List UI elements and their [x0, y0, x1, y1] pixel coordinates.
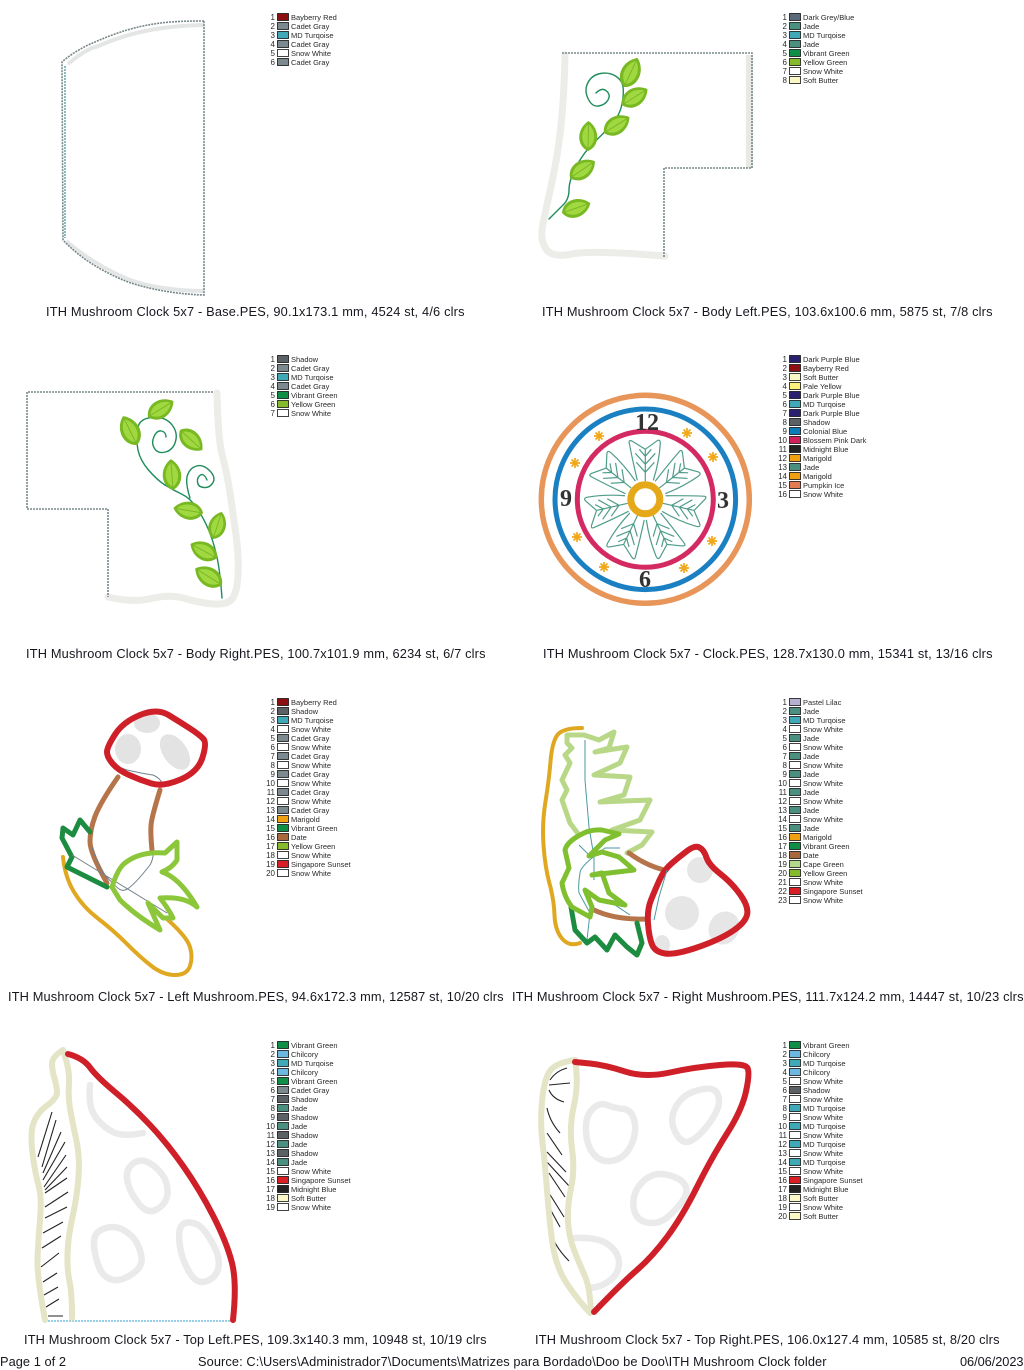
legend: top right colours: Chilcory [803, 1068, 830, 1077]
legend: left mushroom colours: 9 [271, 770, 276, 779]
legend: right mushroom colours: Yellow Green [803, 869, 847, 878]
legend: top left colours: 10 [266, 1122, 276, 1131]
panel: Left Mushroom design [8, 698, 504, 1004]
legend: top right colours: Vibrant Green [803, 1041, 850, 1050]
legend: top right colours: Snow White [803, 1131, 843, 1140]
legend: body right colours: MD Turqoise [291, 373, 334, 382]
legend: body right colours: Cadet Gray [291, 382, 330, 391]
legend: right mushroom colours: Date [803, 851, 819, 860]
legend: top left colours: Singapore Sunset [291, 1176, 352, 1185]
legend: base colours: 4 [271, 40, 276, 49]
caption: base: ITH Mushroom Clock 5x7 - Base.PES, 90.1x173.1 mm, 4524 st, 4/6 clrs [46, 304, 464, 319]
legend: top right colours: 20 [778, 1212, 788, 1221]
legend: top right colours: 13 [778, 1149, 788, 1158]
legend: left mushroom colours: Cadet Gray [291, 752, 330, 761]
legend: right mushroom colours: 19 [778, 860, 788, 869]
legend: base colours [271, 13, 337, 67]
legend: left mushroom colours: Snow White [291, 743, 331, 752]
legend: top left colours: Chilcory [291, 1050, 318, 1059]
legend: body left colours: 8 [783, 76, 788, 85]
legend: body left colours: 2 [783, 22, 788, 31]
legend: right mushroom colours: Cape Green [803, 860, 844, 869]
legend: top left colours: 5 [271, 1077, 276, 1086]
legend: right mushroom colours: Jade [803, 824, 819, 833]
legend: clock colours: Dark Purple Blue [803, 391, 860, 400]
legend: top right colours: 1 [783, 1041, 788, 1050]
legend: top left colours: Shadow [291, 1095, 319, 1104]
legend: top left colours: 19 [266, 1203, 276, 1212]
legend: left mushroom colours: Snow White [291, 725, 331, 734]
legend: right mushroom colours: 15 [778, 824, 788, 833]
legend: top left colours: 18 [266, 1194, 276, 1203]
legend: right mushroom colours: Snow White [803, 878, 843, 887]
artwork: base outline [62, 21, 204, 295]
legend: body left colours: 7 [783, 67, 788, 76]
legend: left mushroom colours: Singapore Sunset [291, 860, 352, 869]
artwork: clock face: 3 [717, 488, 729, 514]
legend: right mushroom colours: 8 [783, 761, 788, 770]
legend: left mushroom colours: 2 [271, 707, 276, 716]
legend: top right colours: 16 [778, 1176, 788, 1185]
legend: base colours: 3 [271, 31, 276, 40]
legend: left mushroom colours: 19 [266, 860, 276, 869]
legend: top right colours: Chilcory [803, 1050, 830, 1059]
panel: Base design [46, 13, 464, 319]
legend: top left colours: Cadet Gray [291, 1086, 330, 1095]
legend: left mushroom colours: Cadet Gray [291, 734, 330, 743]
legend: right mushroom colours: Snow White [803, 743, 843, 752]
legend: left mushroom colours: MD Turqoise [291, 716, 334, 725]
legend: body right colours: Snow White [291, 409, 331, 418]
legend: clock colours: 15 [778, 481, 788, 490]
legend: right mushroom colours: 7 [783, 752, 788, 761]
legend: left mushroom colours [266, 698, 352, 878]
legend: clock colours: 4 [783, 382, 788, 391]
legend: right mushroom colours: Jade [803, 770, 819, 779]
legend: body right colours: 2 [271, 364, 276, 373]
legend: right mushroom colours: 20 [778, 869, 788, 878]
legend: left mushroom colours: 14 [266, 815, 276, 824]
legend: base colours: MD Turqoise [291, 31, 334, 40]
legend: top right colours: Snow White [803, 1077, 843, 1086]
legend: top right colours: 9 [783, 1113, 788, 1122]
artwork: left mushroom [62, 712, 205, 975]
caption: body right: ITH Mushroom Clock 5x7 - Body Right.PES, 100.7x101.9 mm, 6234 st, 6/7 clrs [26, 646, 486, 661]
legend: body left colours [783, 13, 854, 85]
legend: left mushroom colours: 17 [266, 842, 276, 851]
legend: base colours: 5 [271, 49, 276, 58]
legend: right mushroom colours: 11 [779, 788, 788, 797]
legend: top left colours: Jade [291, 1140, 307, 1149]
legend: clock colours [778, 355, 867, 499]
footer: date: 06/06/2023 [960, 1354, 1024, 1369]
panel: Body Left design [542, 13, 992, 319]
legend: body left colours: 3 [783, 31, 788, 40]
legend: left mushroom colours: 7 [271, 752, 276, 761]
legend: top right colours: MD Turqoise [803, 1140, 846, 1149]
legend: right mushroom colours: 5 [783, 734, 788, 743]
legend: base colours: Bayberry Red [291, 13, 337, 22]
legend: clock colours: Marigold [803, 472, 832, 481]
legend: top right colours: Snow White [803, 1167, 843, 1176]
legend: base colours: 6 [271, 58, 276, 67]
legend: top left colours: Jade [291, 1122, 307, 1131]
legend: body right colours: Vibrant Green [291, 391, 338, 400]
panel: Right Mushroom design [512, 698, 1024, 1004]
legend: top left colours: 14 [266, 1158, 276, 1167]
legend: body left colours: Jade [803, 22, 819, 31]
legend: clock colours: Dark Purple Blue [803, 409, 860, 418]
legend: clock colours: 5 [783, 391, 788, 400]
legend: left mushroom colours: 4 [271, 725, 276, 734]
artwork: top right cap [541, 1060, 748, 1313]
legend: top right colours: Snow White [803, 1095, 843, 1104]
legend: body right colours: Cadet Gray [291, 364, 330, 373]
legend: right mushroom colours: Jade [803, 734, 819, 743]
legend: right mushroom colours: 14 [778, 815, 788, 824]
legend: clock colours: 6 [783, 400, 788, 409]
legend: top right colours: Midnight Blue [803, 1185, 848, 1194]
artwork: right mushroom [543, 728, 747, 955]
caption: right mushroom: ITH Mushroom Clock 5x7 - Right Mushroom.PES, 111.7x124.2 mm, 14447 st, 10/23 clrs [512, 989, 1024, 1004]
legend: clock colours: 13 [778, 463, 788, 472]
legend: body left colours: Yellow Green [803, 58, 847, 67]
legend: left mushroom colours: Shadow [291, 707, 319, 716]
legend: top left colours: Jade [291, 1104, 307, 1113]
legend: clock colours: Soft Butter [803, 373, 839, 382]
legend: top left colours: 11 [267, 1131, 276, 1140]
legend: right mushroom colours: 3 [783, 716, 788, 725]
legend: top left colours: 3 [271, 1059, 276, 1068]
legend: right mushroom colours: Jade [803, 806, 819, 815]
legend: top left colours: MD Turqoise [291, 1059, 334, 1068]
caption: top left: ITH Mushroom Clock 5x7 - Top Left.PES, 109.3x140.3 mm, 10948 st, 10/19 clrs [24, 1332, 486, 1347]
legend: top right colours: 6 [783, 1086, 788, 1095]
legend: top left colours: Shadow [291, 1131, 319, 1140]
legend: right mushroom colours: 22 [778, 887, 788, 896]
legend: top left colours: 17 [266, 1185, 276, 1194]
legend: right mushroom colours: Snow White [803, 797, 843, 806]
legend: clock colours: 8 [783, 418, 788, 427]
legend: top right colours: 8 [783, 1104, 788, 1113]
legend: left mushroom colours: Date [291, 833, 307, 842]
legend: top left colours: Snow White [291, 1167, 331, 1176]
legend: top left colours: Vibrant Green [291, 1077, 338, 1086]
legend: clock colours: 1 [783, 355, 788, 364]
legend: top right colours: 17 [778, 1185, 788, 1194]
artwork: clock face: 9 [560, 486, 572, 512]
legend: left mushroom colours: Vibrant Green [291, 824, 338, 833]
legend: right mushroom colours: Singapore Sunset [803, 887, 864, 896]
legend: top right colours: 2 [783, 1050, 788, 1059]
legend: body left colours: Snow White [803, 67, 843, 76]
legend: top left colours: 15 [266, 1167, 276, 1176]
legend: left mushroom colours: 5 [271, 734, 276, 743]
legend: clock colours: Pumpkin Ice [803, 481, 844, 490]
legend: left mushroom colours: 1 [271, 698, 276, 707]
legend: top right colours: 11 [779, 1131, 788, 1140]
legend: top left colours: 8 [271, 1104, 276, 1113]
legend: left mushroom colours: 13 [266, 806, 276, 815]
artwork: top left cap [31, 1050, 235, 1321]
legend: top right colours: 3 [783, 1059, 788, 1068]
legend: clock colours: Blossem Pink Dark [803, 436, 867, 445]
legend: right mushroom colours [778, 698, 864, 905]
legend: body left colours: Vibrant Green [803, 49, 850, 58]
legend: top left colours: 6 [271, 1086, 276, 1095]
legend: right mushroom colours: Jade [803, 707, 819, 716]
legend: left mushroom colours: 8 [271, 761, 276, 770]
legend: clock colours: 2 [783, 364, 788, 373]
legend: top right colours: 10 [778, 1122, 788, 1131]
legend: left mushroom colours: Yellow Green [291, 842, 335, 851]
legend: clock colours: Pale Yellow [803, 382, 842, 391]
panel: Top Right design [535, 1041, 1000, 1347]
legend: top left colours [266, 1041, 352, 1212]
legend: top right colours: MD Turqoise [803, 1059, 846, 1068]
legend: top right colours: Soft Butter [803, 1212, 839, 1221]
legend: clock colours: Jade [803, 463, 819, 472]
legend: body right colours: 5 [271, 391, 276, 400]
panel: Top Left design [24, 1041, 486, 1347]
legend: body left colours: Soft Butter [803, 76, 839, 85]
legend: left mushroom colours: Cadet Gray [291, 770, 330, 779]
legend: top left colours: 1 [271, 1041, 276, 1050]
legend: left mushroom colours: Cadet Gray [291, 788, 330, 797]
legend: top right colours: Singapore Sunset [803, 1176, 864, 1185]
legend: top left colours: Snow White [291, 1203, 331, 1212]
legend: top right colours: 15 [778, 1167, 788, 1176]
legend: right mushroom colours: 23 [778, 896, 788, 905]
legend: right mushroom colours: 17 [778, 842, 788, 851]
legend: base colours: Cadet Gray [291, 58, 330, 67]
legend: right mushroom colours: Vibrant Green [803, 842, 850, 851]
legend: body left colours: MD Turqoise [803, 31, 846, 40]
legend: left mushroom colours: Bayberry Red [291, 698, 337, 707]
legend: base colours: 1 [271, 13, 276, 22]
legend: top left colours: Shadow [291, 1149, 319, 1158]
legend: right mushroom colours: 10 [778, 779, 788, 788]
legend: body right colours: 3 [271, 373, 276, 382]
caption: clock: ITH Mushroom Clock 5x7 - Clock.PES, 128.7x130.0 mm, 15341 st, 13/16 clrs [543, 646, 992, 661]
legend: body right colours [271, 355, 338, 418]
legend: right mushroom colours: 13 [778, 806, 788, 815]
legend: top left colours: Vibrant Green [291, 1041, 338, 1050]
legend: top left colours: 13 [266, 1149, 276, 1158]
legend: right mushroom colours: Snow White [803, 896, 843, 905]
legend: body left colours: 5 [783, 49, 788, 58]
legend: left mushroom colours: 16 [266, 833, 276, 842]
legend: left mushroom colours: 10 [266, 779, 276, 788]
legend: left mushroom colours: Snow White [291, 761, 331, 770]
legend: left mushroom colours: Cadet Gray [291, 806, 330, 815]
legend: body left colours: 6 [783, 58, 788, 67]
legend: right mushroom colours: 21 [778, 878, 788, 887]
legend: body right colours: Yellow Green [291, 400, 335, 409]
legend: top right colours: 4 [783, 1068, 788, 1077]
legend: right mushroom colours: 2 [783, 707, 788, 716]
legend: top right colours: 19 [778, 1203, 788, 1212]
legend: base colours: Cadet Gray [291, 22, 330, 31]
legend: right mushroom colours: Snow White [803, 779, 843, 788]
legend: top right colours: Snow White [803, 1149, 843, 1158]
legend: body right colours: 7 [271, 409, 276, 418]
legend: right mushroom colours: Pastel Lilac [803, 698, 842, 707]
legend: left mushroom colours: Snow White [291, 869, 331, 878]
legend: clock colours: Dark Purple Blue [803, 355, 860, 364]
legend: top left colours: 9 [271, 1113, 276, 1122]
caption: top right: ITH Mushroom Clock 5x7 - Top Right.PES, 106.0x127.4 mm, 10585 st, 8/20 clrs [535, 1332, 1000, 1347]
legend: left mushroom colours: Snow White [291, 797, 331, 806]
footer: source path: Source: C:\Users\Administrador7\Documents\Matrizes para Bordado\Doo be Doo\ITH Mushroom Clock folder [198, 1354, 827, 1369]
legend: top left colours: Shadow [291, 1113, 319, 1122]
legend: clock colours: MD Turqoise [803, 400, 846, 409]
legend: body right colours: Shadow [291, 355, 319, 364]
panel: Body Right design [26, 355, 486, 661]
legend: left mushroom colours: 11 [267, 788, 276, 797]
legend: top right colours [778, 1041, 864, 1221]
artwork: clock face: 6 [639, 567, 651, 593]
legend: top left colours: Jade [291, 1158, 307, 1167]
legend: right mushroom colours: Snow White [803, 761, 843, 770]
legend: clock colours: 9 [783, 427, 788, 436]
legend: clock colours: Colonial Blue [803, 427, 847, 436]
legend: clock colours: 7 [783, 409, 788, 418]
legend: left mushroom colours: Snow White [291, 779, 331, 788]
legend: clock colours: 3 [783, 373, 788, 382]
legend: top right colours: Snow White [803, 1113, 843, 1122]
legend: top right colours: Snow White [803, 1203, 843, 1212]
caption: body left: ITH Mushroom Clock 5x7 - Body Left.PES, 103.6x100.6 mm, 5875 st, 7/8 clrs [542, 304, 992, 319]
legend: top right colours: 12 [778, 1140, 788, 1149]
legend: right mushroom colours: 16 [778, 833, 788, 842]
legend: clock colours: 16 [778, 490, 788, 499]
legend: top left colours: 7 [271, 1095, 276, 1104]
legend: top right colours: 7 [783, 1095, 788, 1104]
legend: body left colours: 4 [783, 40, 788, 49]
legend: right mushroom colours: Jade [803, 788, 819, 797]
legend: top right colours: 18 [778, 1194, 788, 1203]
legend: right mushroom colours: Marigold [803, 833, 832, 842]
legend: right mushroom colours: 4 [783, 725, 788, 734]
legend: body right colours: 1 [271, 355, 276, 364]
legend: clock colours: 12 [778, 454, 788, 463]
legend: right mushroom colours: MD Turqoise [803, 716, 846, 725]
legend: right mushroom colours: 18 [778, 851, 788, 860]
legend: right mushroom colours: 12 [778, 797, 788, 806]
legend: top right colours: MD Turqoise [803, 1158, 846, 1167]
legend: clock colours: Marigold [803, 454, 832, 463]
legend: left mushroom colours: 12 [266, 797, 276, 806]
artwork: body right with vine [27, 392, 238, 604]
legend: body left colours: 1 [783, 13, 788, 22]
legend: base colours: 2 [271, 22, 276, 31]
legend: left mushroom colours: 15 [266, 824, 276, 833]
legend: clock colours: Shadow [803, 418, 831, 427]
legend: top left colours: Soft Butter [291, 1194, 327, 1203]
legend: body left colours: Dark Grey/Blue [803, 13, 854, 22]
legend: clock colours: 14 [778, 472, 788, 481]
legend: left mushroom colours: 20 [266, 869, 276, 878]
legend: right mushroom colours: 6 [783, 743, 788, 752]
legend: left mushroom colours: 18 [266, 851, 276, 860]
legend: top right colours: MD Turqoise [803, 1104, 846, 1113]
legend: right mushroom colours: 1 [783, 698, 788, 707]
legend: top right colours: Shadow [803, 1086, 831, 1095]
legend: base colours: Snow White [291, 49, 331, 58]
legend: right mushroom colours: 9 [783, 770, 788, 779]
legend: top right colours: 5 [783, 1077, 788, 1086]
legend: right mushroom colours: Snow White [803, 725, 843, 734]
legend: clock colours: Midnight Blue [803, 445, 848, 454]
legend: top left colours: 2 [271, 1050, 276, 1059]
legend: top right colours: Soft Butter [803, 1194, 839, 1203]
legend: left mushroom colours: Snow White [291, 851, 331, 860]
legend: top right colours: 14 [778, 1158, 788, 1167]
legend: top left colours: 16 [266, 1176, 276, 1185]
legend: base colours: Cadet Gray [291, 40, 330, 49]
legend: right mushroom colours: Snow White [803, 815, 843, 824]
footer: page number: Page 1 of 2 [0, 1354, 66, 1369]
legend: body right colours: 6 [271, 400, 276, 409]
legend: clock colours: Snow White [803, 490, 843, 499]
legend: top right colours: MD Turqoise [803, 1122, 846, 1131]
legend: body right colours: 4 [271, 382, 276, 391]
artwork: clock face: 12 [635, 410, 659, 436]
panel: Clock design [541, 355, 992, 661]
legend: right mushroom colours: Jade [803, 752, 819, 761]
legend: left mushroom colours: 6 [271, 743, 276, 752]
artwork: body left with vine [542, 53, 752, 257]
legend: top left colours: Chilcory [291, 1068, 318, 1077]
legend: clock colours: 11 [779, 445, 788, 454]
legend: top left colours: Midnight Blue [291, 1185, 336, 1194]
legend: top left colours: 4 [271, 1068, 276, 1077]
legend: left mushroom colours: Marigold [291, 815, 320, 824]
legend: clock colours: Bayberry Red [803, 364, 849, 373]
legend: body left colours: Jade [803, 40, 819, 49]
legend: clock colours: 10 [778, 436, 788, 445]
legend: top left colours: 12 [266, 1140, 276, 1149]
artwork: clock face [541, 395, 749, 603]
legend: left mushroom colours: 3 [271, 716, 276, 725]
caption: left mushroom: ITH Mushroom Clock 5x7 - Left Mushroom.PES, 94.6x172.3 mm, 12587 st, 10/20 clrs [8, 989, 504, 1004]
